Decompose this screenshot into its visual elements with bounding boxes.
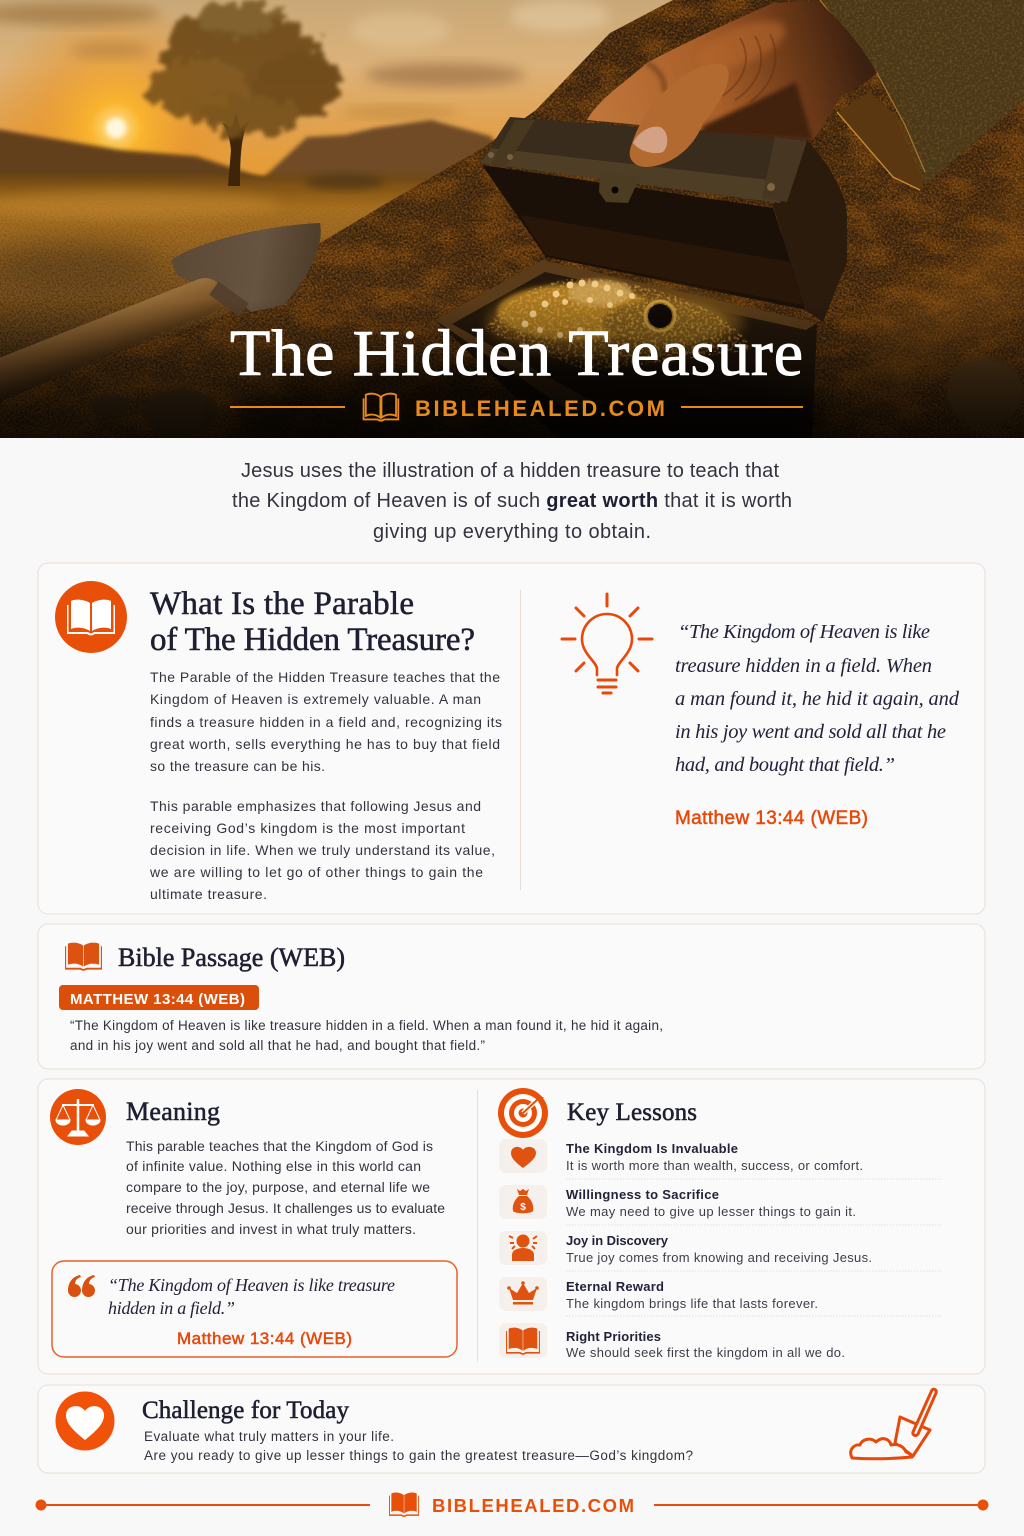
icon: heart in circle xyxy=(56,1392,114,1450)
icon: book xyxy=(389,1493,419,1517)
icon: book xyxy=(506,1328,540,1355)
chest hasp xyxy=(599,179,636,203)
field xyxy=(0,172,436,402)
body text: This parable emphasizes that following Jesus and xyxy=(150,798,481,814)
scripture quote xyxy=(675,621,960,776)
rocks xyxy=(90,358,1023,436)
icon: open book in circle xyxy=(55,581,127,653)
lesson: right priorities: Right Priorities xyxy=(566,1329,661,1344)
passage text: and in his joy went and sold all that he had, and bought that field.” xyxy=(70,1038,485,1053)
intro paragraph: Jesus uses the illustration of a hidden treasure to teach that xyxy=(241,460,779,482)
lesson: willingness to sacrifice xyxy=(499,1185,942,1225)
footer brand bar xyxy=(36,1493,988,1517)
lesson: right priorities xyxy=(499,1323,845,1360)
treasure chest xyxy=(435,117,847,440)
panel: bible passage xyxy=(38,924,985,1069)
scripture quote: “The Kingdom of Heaven is like xyxy=(678,621,930,643)
sleeve xyxy=(820,0,1024,190)
heading: Challenge for Today xyxy=(142,1397,350,1424)
heading: What Is the Parable xyxy=(150,586,414,622)
chest lid interior xyxy=(482,165,807,310)
icon: money bag: $ xyxy=(520,1202,526,1213)
reference badge xyxy=(59,985,259,1010)
lesson: willingness to sacrifice: We may need to give up lesser things to gain it. xyxy=(566,1204,856,1219)
scripture quote: had, and bought that field.” xyxy=(675,754,895,776)
meaning text: compare to the joy, purpose, and eternal life we xyxy=(126,1179,430,1195)
sky xyxy=(0,0,673,178)
meaning text: our priorities and invest in what truly matters. xyxy=(126,1221,416,1237)
body text xyxy=(149,669,502,902)
icon: money bag xyxy=(513,1189,533,1213)
lesson: kingdom is invaluable: The Kingdom Is Invaluable xyxy=(566,1141,738,1156)
quote reference: Matthew 13:44 (WEB) xyxy=(675,808,868,829)
callout: quote box: hidden in a field.” xyxy=(108,1298,235,1318)
shovel xyxy=(0,223,321,377)
passage text xyxy=(70,1018,663,1053)
body text: decision in life. When we truly understand its value, xyxy=(150,842,495,858)
icon: balance scales xyxy=(50,1089,106,1145)
bottom dark overlay xyxy=(0,306,1024,438)
meaning text: receive through Jesus. It challenges us to evaluate xyxy=(126,1200,445,1216)
reference badge: MATTHEW 13:44 (WEB) xyxy=(70,991,245,1008)
hand xyxy=(587,0,877,140)
distant mountains xyxy=(0,118,496,179)
scripture quote: a man found it, he hid it again, and xyxy=(675,688,960,710)
hero image: sunset field with hand opening treasure chest xyxy=(0,0,1024,480)
lesson: kingdom is invaluable xyxy=(499,1139,942,1179)
lesson: joy in discovery: True joy comes from knowing and receiving Jesus. xyxy=(566,1250,872,1265)
field grain xyxy=(0,205,374,401)
footer brand bar: BIBLEHEALED.COM xyxy=(432,1495,634,1516)
icon: target with arrow xyxy=(498,1088,548,1138)
challenge text xyxy=(144,1429,693,1463)
warm light on soil xyxy=(862,202,1024,384)
panel: meaning and key lessons xyxy=(38,1079,985,1374)
icon: light bulb xyxy=(562,594,652,693)
body text: ultimate treasure. xyxy=(150,886,267,902)
hero title: The Hidden Treasure xyxy=(230,317,803,390)
chest lid top xyxy=(480,117,807,180)
lesson: willingness to sacrifice: Willingness to Sacrifice xyxy=(566,1187,719,1202)
lesson: joy in discovery: Joy in Discovery xyxy=(566,1233,669,1248)
body text: finds a treasure hidden in a field and, recognizing its xyxy=(150,714,502,730)
meaning text: This parable teaches that the Kingdom of God is xyxy=(126,1138,433,1154)
icon: book xyxy=(65,943,102,971)
challenge text: Evaluate what truly matters in your life. xyxy=(144,1429,394,1444)
body text: we are willing to let go of other things to gain the xyxy=(149,864,483,880)
panel: what is the parable xyxy=(38,563,985,914)
soil mound xyxy=(0,0,1024,438)
thumbnail xyxy=(633,127,667,153)
lesson: joy in discovery xyxy=(499,1231,942,1271)
lesson: eternal reward: Eternal Reward xyxy=(566,1279,664,1294)
icon: crown xyxy=(507,1281,539,1304)
heading xyxy=(150,586,475,658)
lone tree xyxy=(148,2,340,186)
lesson: eternal reward xyxy=(499,1277,942,1316)
thumb xyxy=(630,64,729,167)
passage text: “The Kingdom of Heaven is like treasure hidden in a field. When a man found it, he hid it again, xyxy=(70,1018,663,1033)
lesson: kingdom is invaluable: It is worth more than wealth, success, or comfort. xyxy=(566,1158,863,1173)
body text: great worth, sells everything he has to buy that field xyxy=(150,736,500,752)
scripture quote: in his joy went and sold all that he xyxy=(675,721,946,743)
heading: Bible Passage (WEB) xyxy=(118,943,345,972)
meaning text xyxy=(126,1138,445,1237)
icon: shovel in dirt xyxy=(851,1389,936,1459)
panel: challenge for today xyxy=(38,1385,985,1473)
heading: key lessons: Key Lessons xyxy=(567,1099,697,1126)
intro paragraph xyxy=(232,460,792,543)
body text: Kingdom of Heaven is extremely valuable. A man xyxy=(150,691,481,707)
heading: meaning: Meaning xyxy=(126,1097,220,1126)
intro paragraph: giving up everything to obtain. xyxy=(373,521,651,543)
callout: quote box: “The Kingdom of Heaven is like treasure xyxy=(108,1275,395,1295)
lesson: eternal reward: The kingdom brings life that lasts forever. xyxy=(566,1296,818,1311)
hero brand line with book icon xyxy=(230,394,803,421)
scripture quote: treasure hidden in a field. When xyxy=(675,655,932,677)
challenge text: Are you ready to give up lesser things to gain the greatest treasure—God’s kingdom? xyxy=(144,1448,693,1463)
chest box xyxy=(435,260,817,440)
intro paragraph: the Kingdom of Heaven is of such great worth that it is worth xyxy=(232,490,792,512)
icon: book outline xyxy=(364,394,398,421)
lesson: right priorities: We should seek first the kingdom in all we do. xyxy=(566,1345,845,1360)
icon: heart xyxy=(511,1147,536,1168)
sun xyxy=(106,118,126,138)
meaning text: of infinite value. Nothing else in this world can xyxy=(126,1158,421,1174)
gold and pearls xyxy=(482,277,751,372)
hero brand line with book icon: BIBLEHEALED.COM xyxy=(415,396,665,421)
chest lid end cap xyxy=(773,140,847,322)
icon: quotation marks xyxy=(68,1275,95,1297)
body text: so the treasure can be his. xyxy=(150,758,325,774)
callout: quote box: Matthew 13:44 (WEB) xyxy=(177,1329,352,1348)
icon: joyful person xyxy=(509,1234,537,1261)
heading: of The Hidden Treasure? xyxy=(150,622,475,658)
body text: receiving God’s kingdom is the most important xyxy=(150,820,465,836)
callout: quote box xyxy=(52,1261,457,1357)
body text: The Parable of the Hidden Treasure teaches that the xyxy=(150,669,500,685)
